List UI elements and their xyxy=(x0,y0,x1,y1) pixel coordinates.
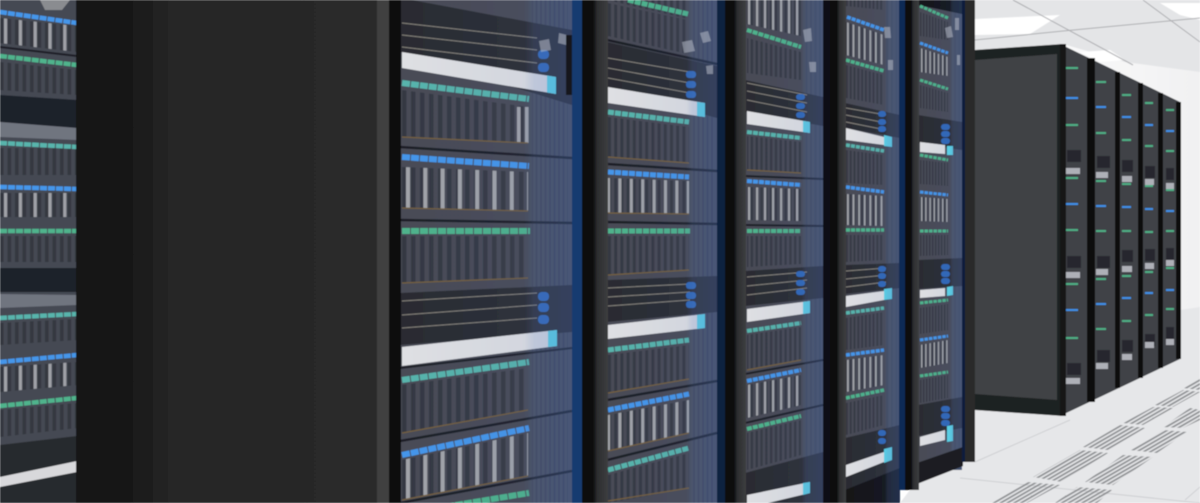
white strip xyxy=(402,330,557,366)
unit: blue lights xyxy=(607,172,717,224)
dark unit, white strip and base xyxy=(845,425,900,503)
unit: blue bars xyxy=(0,355,77,392)
dark unit xyxy=(607,276,717,322)
unit: blue lights xyxy=(400,157,572,223)
unit: green and blue xyxy=(0,143,77,175)
vent column xyxy=(532,0,568,503)
big dark side panel xyxy=(76,0,378,503)
rack 3 xyxy=(745,0,823,503)
unit: green and blue xyxy=(0,314,77,345)
dark unit and white strip xyxy=(0,436,77,503)
white strip xyxy=(608,314,705,339)
back wall xyxy=(975,0,1200,420)
unit: green lights xyxy=(745,323,823,374)
middle units xyxy=(846,145,884,262)
left rack sliver xyxy=(0,0,77,503)
dark unit xyxy=(0,268,77,308)
upper units xyxy=(918,6,962,150)
dark unit xyxy=(607,42,717,118)
dark unit and white strip xyxy=(745,452,823,503)
far row: side panel xyxy=(975,44,1063,416)
white strip xyxy=(846,288,892,307)
rear shadow xyxy=(566,35,572,95)
top cap xyxy=(918,0,962,14)
glass reflections xyxy=(607,0,717,503)
white strip xyxy=(920,142,953,155)
unit: blue lights xyxy=(400,428,572,503)
lower units xyxy=(846,308,884,435)
unit: green lights xyxy=(745,132,823,179)
dark unit xyxy=(0,95,77,140)
vent column xyxy=(703,1,704,502)
rack frame pillars xyxy=(377,0,975,503)
unit: green xyxy=(0,231,77,262)
unit: green lights xyxy=(607,340,717,400)
unit: green lights xyxy=(608,231,690,275)
rack 2 xyxy=(607,0,717,503)
far rack white strips xyxy=(1066,171,1174,381)
white strip xyxy=(920,286,953,298)
vent column xyxy=(951,0,960,470)
unit: green lights xyxy=(608,448,689,503)
unit: bottom green xyxy=(450,490,530,503)
dark unit xyxy=(845,263,900,294)
unit: blue lights xyxy=(745,370,823,423)
vent column xyxy=(886,0,899,503)
far rack green lights xyxy=(1066,68,1174,338)
middle units xyxy=(918,155,962,289)
rack 5 xyxy=(918,0,962,470)
glass reflections xyxy=(845,0,900,503)
unit: green lights xyxy=(400,348,572,441)
unit: blue bars xyxy=(0,12,77,56)
unit: green xyxy=(0,398,77,437)
unit: green lights xyxy=(747,231,801,267)
white strip xyxy=(920,425,953,446)
rack 5 curved base xyxy=(917,447,963,484)
ceiling xyxy=(975,0,1200,72)
white strip xyxy=(846,128,892,147)
upper units xyxy=(845,0,900,138)
top unit xyxy=(607,0,717,64)
top unit xyxy=(747,0,801,80)
glass reflections xyxy=(745,0,823,503)
unit: blue lights xyxy=(607,394,717,460)
far rack dark units xyxy=(1067,156,1174,369)
unit: green lights xyxy=(747,416,801,470)
unit: green lights xyxy=(402,231,530,283)
far rack blue lights xyxy=(1066,98,1174,310)
dark unit xyxy=(745,80,823,126)
top dark unit xyxy=(400,0,572,105)
raised floor xyxy=(900,307,1200,503)
white strip xyxy=(608,87,705,117)
glass reflections xyxy=(918,0,962,470)
lower dark unit xyxy=(400,285,572,345)
rack 1 xyxy=(400,0,572,503)
glass reflections xyxy=(477,0,572,503)
unit: blue lights xyxy=(745,181,823,226)
dark unit xyxy=(745,266,823,306)
unit: green lights xyxy=(607,112,717,171)
unit: green lights xyxy=(400,83,572,158)
white strip xyxy=(402,52,556,94)
lower units xyxy=(918,300,962,436)
far row: rack faces xyxy=(1060,44,1181,416)
vent column xyxy=(803,0,821,503)
white strip xyxy=(747,301,810,322)
white strip xyxy=(747,111,810,133)
unit: blue bars xyxy=(0,187,77,217)
perforated floor tiles xyxy=(992,378,1200,503)
rack 4 xyxy=(845,0,900,503)
unit: green xyxy=(0,56,77,95)
